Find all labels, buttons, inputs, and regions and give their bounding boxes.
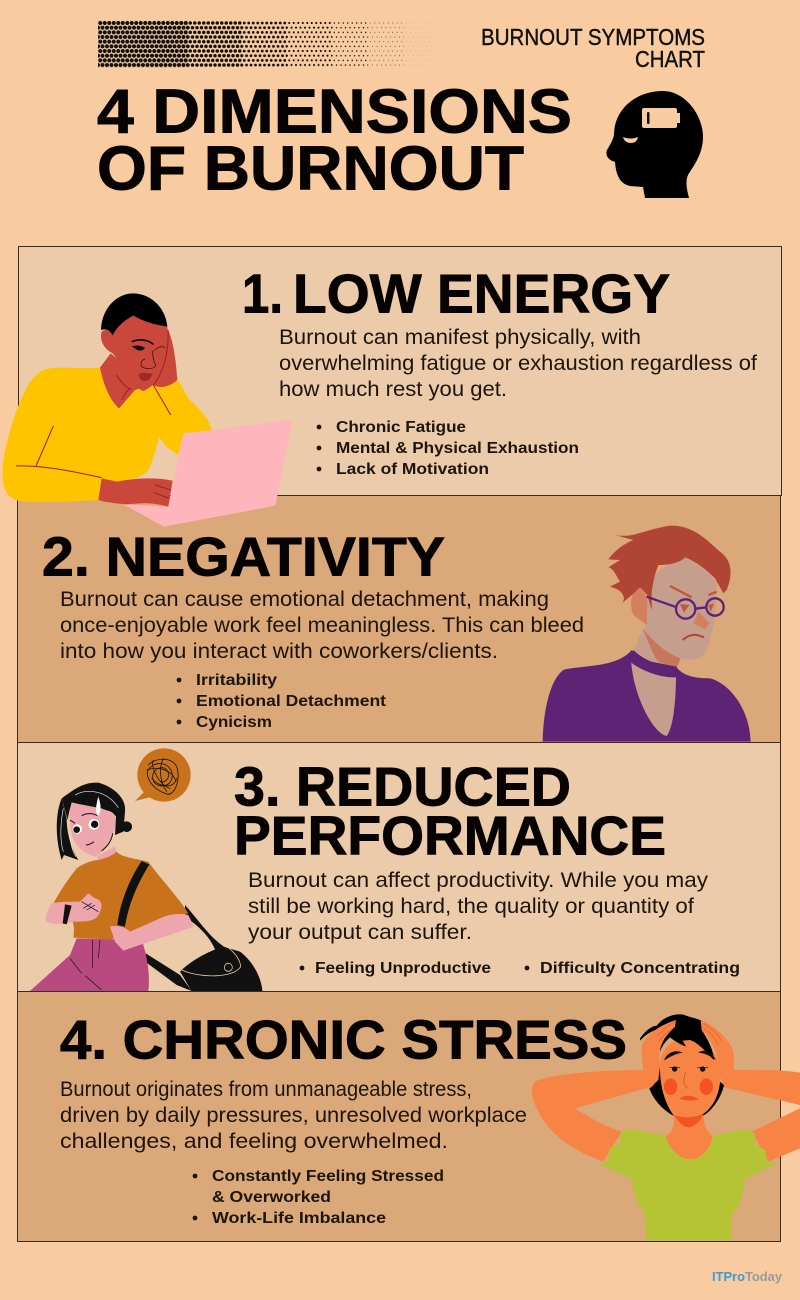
title xyxy=(97,78,572,204)
list: low energy symptoms: Chronic Fatigue xyxy=(336,419,466,436)
illustration: stressed woman checking watch xyxy=(30,748,262,991)
title: OF BURNOUT xyxy=(97,134,524,204)
panel: 3 reduced performance xyxy=(18,742,780,992)
text: reduced performance description: Burnout can affect productivity. While you may xyxy=(248,869,709,892)
list: chronic stress symptoms xyxy=(193,1168,444,1227)
heading: chronic stress: 4. CHRONIC STRESS xyxy=(60,1008,627,1070)
title: 4 DIMENSIONS xyxy=(97,78,572,146)
list: negativity symptoms: Cynicism xyxy=(196,714,272,731)
illustration: overwhelmed person holding head xyxy=(532,1014,800,1240)
list: chronic stress symptoms: Constantly Feeling Stressed xyxy=(212,1168,444,1185)
text: chronic stress description xyxy=(60,1078,527,1153)
subtitle: CHART xyxy=(635,46,705,72)
panel: 1 low energy xyxy=(3,246,781,527)
heading: negativity: 2. NEGATIVITY xyxy=(42,526,445,588)
list: negativity symptoms: Emotional Detachment xyxy=(196,693,387,710)
icon: thought bubble with scribble xyxy=(135,748,191,802)
list: low energy symptoms: Mental & Physical Exhaustion xyxy=(336,440,579,457)
subtitle xyxy=(481,24,705,72)
text: reduced performance description: your output can suffer. xyxy=(248,921,472,944)
halftone dot band xyxy=(98,20,431,68)
list: reduced performance symptoms: Difficulty Concentrating xyxy=(540,960,740,977)
text: negativity description xyxy=(60,588,584,663)
panel: 2 negativity xyxy=(18,496,780,742)
text: low energy description: Burnout can manifest physically, with xyxy=(279,326,641,349)
list: negativity symptoms xyxy=(177,672,387,731)
heading: reduced performance xyxy=(234,756,666,866)
list: chronic stress symptoms: Work-Life Imbalance xyxy=(212,1210,386,1227)
illustration: angry person with glasses xyxy=(543,526,751,742)
heading: low energy: 1. xyxy=(242,262,283,324)
logo: ITPro Today: ITProToday xyxy=(712,1269,783,1284)
illustration: tired man at laptop xyxy=(3,293,292,527)
list: chronic stress symptoms: & Overworked xyxy=(212,1189,331,1206)
text: chronic stress description: Burnout originates from unmanageable stress, xyxy=(60,1078,472,1101)
text: low energy description xyxy=(279,326,757,401)
list: negativity symptoms: Irritability xyxy=(196,672,277,689)
heading: low energy: LOW ENERGY xyxy=(293,262,670,324)
list: reduced performance symptoms: Feeling Unproductive xyxy=(315,960,491,977)
text: negativity description: into how you interact with coworkers/clients. xyxy=(60,640,498,663)
text: reduced performance description xyxy=(248,869,709,944)
list: reduced performance symptoms xyxy=(300,960,740,977)
subtitle: BURNOUT SYMPTOMS xyxy=(481,24,705,50)
text: reduced performance description: still be working hard, the quality or quantity of xyxy=(248,895,694,918)
heading: reduced performance: PERFORMANCE xyxy=(234,804,666,866)
text: low energy description: how much rest you get. xyxy=(279,378,507,401)
text: chronic stress description: driven by daily pressures, unresolved workplace xyxy=(60,1104,527,1127)
icon: head with low battery xyxy=(606,91,703,198)
list: low energy symptoms xyxy=(317,419,579,478)
text: negativity description: once-enjoyable work feel meaningless. This can bleed xyxy=(60,614,584,637)
text: negativity description: Burnout can cause emotional detachment, making xyxy=(60,588,549,611)
heading: reduced performance: 3. REDUCED xyxy=(234,756,571,818)
panel: 4 chronic stress xyxy=(18,992,800,1242)
text: chronic stress description: challenges, and feeling overwhelmed. xyxy=(60,1130,448,1153)
text: low energy description: overwhelming fatigue or exhaustion regardless of xyxy=(279,352,757,375)
list: low energy symptoms: Lack of Motivation xyxy=(336,461,489,478)
